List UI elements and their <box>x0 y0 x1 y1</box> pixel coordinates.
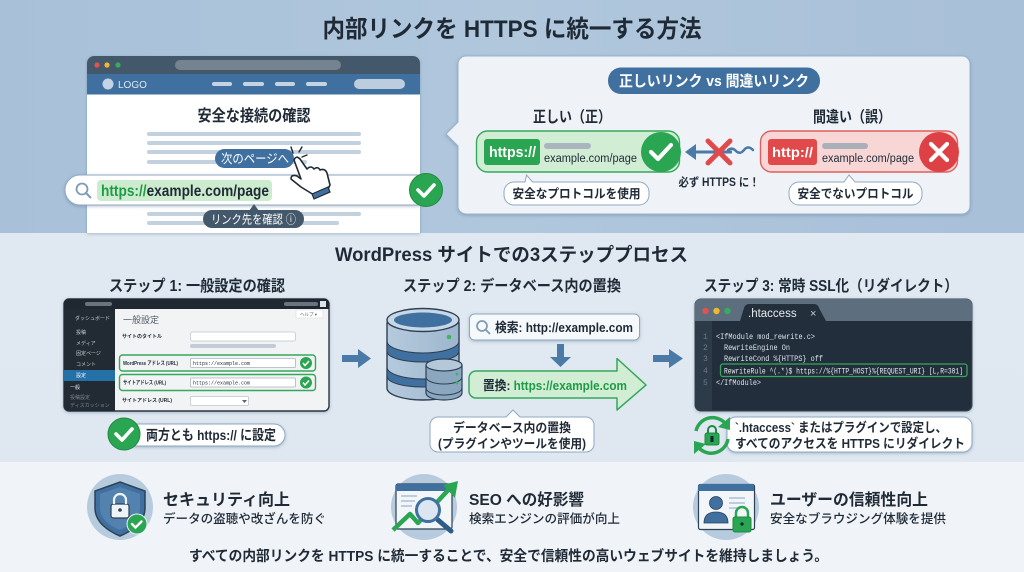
correct URL card: example.com/page <box>544 153 637 165</box>
tooltip: check link target <box>203 204 304 228</box>
URL bar <box>65 175 431 205</box>
tooltip: check link target: リンク先を確認 ⓘ <box>211 212 296 226</box>
browser window <box>87 56 420 233</box>
WordPress settings screenshot: 投稿設定 <box>70 394 90 401</box>
callout: database replacement <box>430 410 594 452</box>
browser window: LOGO <box>118 80 147 91</box>
benefit description: データの盗聴や改ざんを防ぐ <box>163 511 326 526</box>
replace arrow <box>469 358 646 410</box>
panel: browser mockup <box>65 56 442 233</box>
code editor: RewriteCond %{HTTPS} off <box>724 354 823 364</box>
code editor: 4 <box>703 367 708 376</box>
callout: database replacement: (プラグインやツールを使用) <box>438 436 586 451</box>
highlighted row: site address: サイトアドレス (URL) <box>123 380 166 386</box>
panel: correct vs incorrect links <box>446 56 970 214</box>
callout: insecure protocol <box>789 175 922 205</box>
WordPress settings screenshot: コメント <box>76 362 96 368</box>
arrow: http to https with red cross <box>685 141 753 163</box>
icon: green check <box>410 174 442 206</box>
WordPress settings screenshot: 投稿 <box>76 329 86 336</box>
panel background <box>446 56 970 214</box>
WordPress settings screenshot: ディスカッション <box>70 402 110 409</box>
badge: both set to https <box>108 418 285 450</box>
callout: secure protocol <box>504 175 649 205</box>
heading: incorrect: 間違い（誤） <box>813 107 891 126</box>
benefit description: 検索エンジンの評価が向上 <box>469 511 620 526</box>
search box: 検索: http://example.com <box>495 320 633 335</box>
icon: hand cursor <box>291 147 330 199</box>
callout: database replacement: データベース内の置換 <box>453 420 571 435</box>
icon: database <box>387 308 462 400</box>
WordPress settings screenshot: 設定 <box>76 372 86 379</box>
highlighted row: WordPress address: WordPress アドレス (URL) <box>123 360 178 367</box>
code editor: RewriteEngine On <box>724 343 790 353</box>
URL bar: https://example.com/page <box>101 183 269 200</box>
search box <box>470 314 640 340</box>
icon: user profile with lock <box>693 474 759 540</box>
callout: htaccess note: すべてのアクセスを HTTPS にリダイレクト <box>735 436 965 451</box>
benefit heading: ユーザーの信頼性向上 <box>770 490 928 509</box>
WordPress settings screenshot: サイトのタイトル <box>122 333 162 340</box>
step 3 heading: ステップ 3: 常時 SSL化（リダイレクト） <box>704 276 958 295</box>
arrow: step 1 to step 2 <box>342 349 371 368</box>
callout: insecure protocol: 安全でないプロトコル <box>798 186 914 201</box>
highlighted code line <box>720 364 967 376</box>
benefit description: 安全なブラウジング体験を提供 <box>770 511 946 526</box>
heading: correct: 正しい（正） <box>533 108 611 126</box>
note: always HTTPS: 必ず HTTPS に！ <box>678 175 760 189</box>
settings row: site address dropdown <box>122 396 248 406</box>
incorrect URL card: example.com/page <box>822 153 914 165</box>
section heading: three steps: WordPress サイトでの3ステッププロセス <box>335 244 688 266</box>
code editor: <IfModule mod_rewrite.c> <box>716 332 815 342</box>
correct URL card <box>476 131 681 172</box>
settings row: site address dropdown: サイトアドレス (URL) <box>122 398 172 404</box>
step 2 <box>387 276 646 452</box>
text placeholder lines <box>147 132 361 225</box>
highlighted row: site address <box>120 374 316 390</box>
WordPress settings screenshot: メディア <box>76 340 96 347</box>
code editor: </IfModule> <box>716 378 761 388</box>
highlighted row: site address: https://example.com <box>193 380 250 386</box>
step 3 <box>694 276 972 454</box>
WordPress settings screenshot: 一般 <box>70 384 80 391</box>
benefit: security <box>87 474 326 540</box>
WordPress settings screenshot: 一般設定 <box>123 314 159 325</box>
step 2 heading: ステップ 2: データベース内の置換 <box>403 276 621 295</box>
incorrect URL card: http:// <box>772 144 813 160</box>
step 1 <box>64 276 329 450</box>
highlighted row: WordPress address: https://example.com <box>193 361 250 367</box>
page heading: 安全な接続の確認 <box>198 106 310 125</box>
button: next page: 次のページへ <box>221 152 289 166</box>
benefit heading: セキュリティ向上 <box>163 491 290 509</box>
code editor: 2 <box>703 344 708 353</box>
WordPress settings screenshot <box>64 299 329 411</box>
closing message: すべての内部リンクを HTTPS に統一することで、安全で信頼性の高いウェブサイトを維持しましょう。 <box>189 547 828 565</box>
icon: shield <box>87 474 153 540</box>
code editor: .htaccess <box>748 308 797 320</box>
badge: both set to https: 両方とも https:// に設定 <box>146 427 276 443</box>
benefit heading: SEO への好影響 <box>469 490 584 509</box>
code editor: × <box>810 308 816 320</box>
benefit: user trust <box>693 474 946 540</box>
arrow: down <box>550 344 571 367</box>
incorrect URL card <box>760 131 959 172</box>
replace arrow: 置換: https://example.com <box>483 378 627 393</box>
panel heading pill: 正しいリンク vs 間違いリンク <box>619 72 809 90</box>
icon: sync lock <box>694 417 730 454</box>
code editor <box>695 299 972 411</box>
arrow: step 2 to step 3 <box>653 349 683 368</box>
button: next page <box>215 149 294 168</box>
WordPress settings screenshot: ダッシュボード <box>75 315 110 322</box>
code editor: 1 <box>703 333 708 342</box>
highlighted row: WordPress address <box>120 355 316 371</box>
WordPress settings screenshot: 固定ページ <box>76 351 101 357</box>
callout: secure protocol: 安全なプロトコルを使用 <box>512 186 640 201</box>
code editor: 3 <box>703 355 708 364</box>
callout: htaccess note <box>727 417 972 452</box>
panel heading pill <box>608 68 820 94</box>
benefit: SEO <box>391 474 620 540</box>
code editor: 5 <box>703 379 708 388</box>
correct URL card: https:// <box>489 145 536 161</box>
callout: htaccess note: `.htaccess` またはプラグインで設定し、 <box>735 420 947 435</box>
icon: SEO chart and magnifier <box>391 474 458 540</box>
step 1 heading: ステップ 1: 一般設定の確認 <box>109 276 285 295</box>
title: 内部リンクを HTTPS に統一する方法 <box>322 16 702 43</box>
WordPress settings screenshot: ヘルプ ▾ <box>300 312 318 318</box>
